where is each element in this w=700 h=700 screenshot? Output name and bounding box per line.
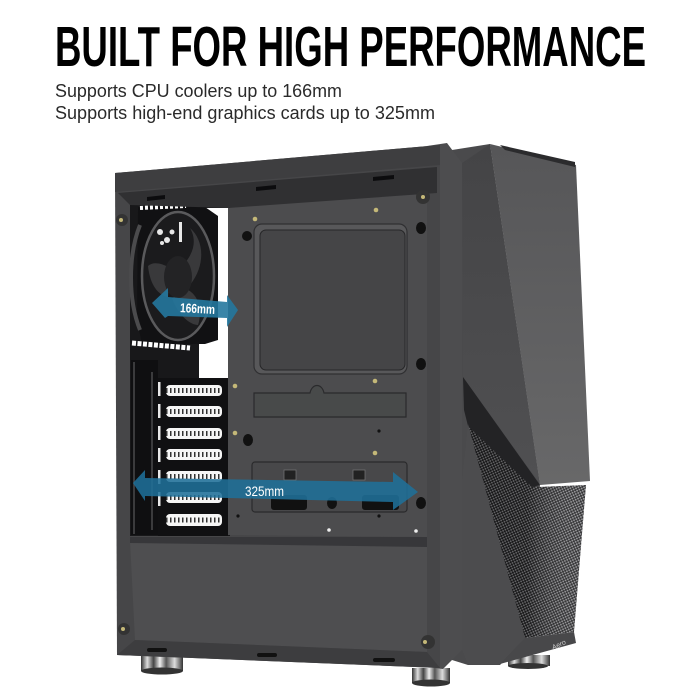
spec line: graphics cards: Supports high-end graphics cards up to 325mm bbox=[55, 103, 435, 123]
top vent shadow bbox=[500, 145, 575, 167]
arrow: 166mm cooler clearance bbox=[152, 288, 238, 327]
fan blades bbox=[148, 228, 201, 325]
cpu cutout bbox=[254, 224, 407, 374]
top band bbox=[115, 145, 440, 192]
arrow label: 325mm bbox=[245, 483, 284, 499]
thumbscrew top left bbox=[116, 214, 128, 226]
fan frame bbox=[137, 207, 218, 344]
arrow label: 166mm bbox=[180, 300, 215, 317]
spec line: CPU coolers: Supports CPU coolers up to 166mm bbox=[55, 81, 342, 101]
white standoffs bbox=[327, 528, 418, 533]
rail plate bbox=[117, 640, 440, 668]
lower recess bbox=[252, 462, 407, 512]
fan hub bbox=[164, 256, 192, 298]
cable slots bbox=[271, 495, 399, 510]
panel backing bbox=[452, 144, 540, 665]
slot row 4 bbox=[166, 449, 222, 460]
base strip bbox=[500, 632, 576, 664]
fan vent holes bottom bbox=[132, 343, 190, 348]
dark wedge bbox=[463, 377, 540, 487]
text block: specifications bbox=[55, 81, 435, 123]
foot: front left bbox=[141, 656, 183, 674]
internal bay: rear opening bbox=[130, 198, 230, 536]
arrow: 325mm graphics card clearance bbox=[133, 470, 418, 510]
rail slots bbox=[147, 175, 394, 201]
shroud top edge bbox=[130, 537, 427, 547]
slot row 1 bbox=[166, 385, 222, 396]
slot row 6 bbox=[166, 492, 222, 503]
rear fan bbox=[131, 206, 218, 348]
mounting holes bbox=[236, 222, 426, 518]
mesh shading bbox=[468, 424, 586, 638]
retention clips bbox=[284, 470, 365, 480]
upper angled facet bbox=[462, 144, 540, 484]
bracket column bbox=[131, 360, 158, 535]
corner thumbscrews bbox=[116, 190, 435, 649]
upper recess bbox=[254, 386, 406, 417]
slot row 2 bbox=[166, 406, 222, 417]
mesh grille bbox=[468, 424, 586, 638]
arrow shape bbox=[133, 470, 418, 510]
slot row 3 bbox=[166, 428, 222, 439]
front pillar bbox=[427, 143, 462, 669]
fan vent holes top bbox=[140, 206, 186, 208]
thumbscrew bottom left bbox=[118, 623, 130, 635]
inner rail bbox=[118, 167, 437, 208]
expansion slot covers bbox=[158, 378, 228, 536]
mesh intake bbox=[468, 424, 586, 638]
thumbscrew top right bbox=[416, 190, 430, 204]
tray plate bbox=[228, 193, 427, 537]
arrow shape bbox=[152, 288, 238, 327]
rear opening backdrop bbox=[130, 198, 230, 536]
bottom rail bbox=[117, 640, 440, 668]
fan ring depth bbox=[131, 225, 140, 330]
slot row 5 bbox=[166, 471, 222, 482]
upper light panel bbox=[490, 144, 590, 485]
brand logo mark: Aero bbox=[550, 639, 567, 652]
power supply shroud bbox=[130, 538, 427, 652]
cutout rim bbox=[254, 224, 407, 374]
foot: front right bbox=[412, 668, 450, 686]
gold standoff screws bbox=[233, 208, 378, 455]
slot brackets bbox=[158, 382, 160, 506]
case left frame bbox=[115, 145, 440, 668]
slot row 7 bbox=[166, 514, 222, 526]
thumbscrew bottom right bbox=[421, 635, 435, 649]
fan ring bbox=[142, 212, 214, 340]
cutout recess bbox=[260, 230, 405, 370]
case feet bbox=[141, 655, 550, 686]
motherboard tray bbox=[228, 193, 427, 537]
rail slots bbox=[147, 648, 395, 662]
white cutout beside fan bbox=[199, 208, 228, 378]
fan vent speckle bbox=[157, 222, 182, 245]
top rail bbox=[115, 145, 440, 208]
right side panel bbox=[452, 144, 590, 665]
bracket rails bbox=[134, 362, 152, 534]
foot: rear right bbox=[508, 655, 550, 669]
lower facet bbox=[462, 424, 530, 665]
computer case bbox=[115, 143, 590, 686]
